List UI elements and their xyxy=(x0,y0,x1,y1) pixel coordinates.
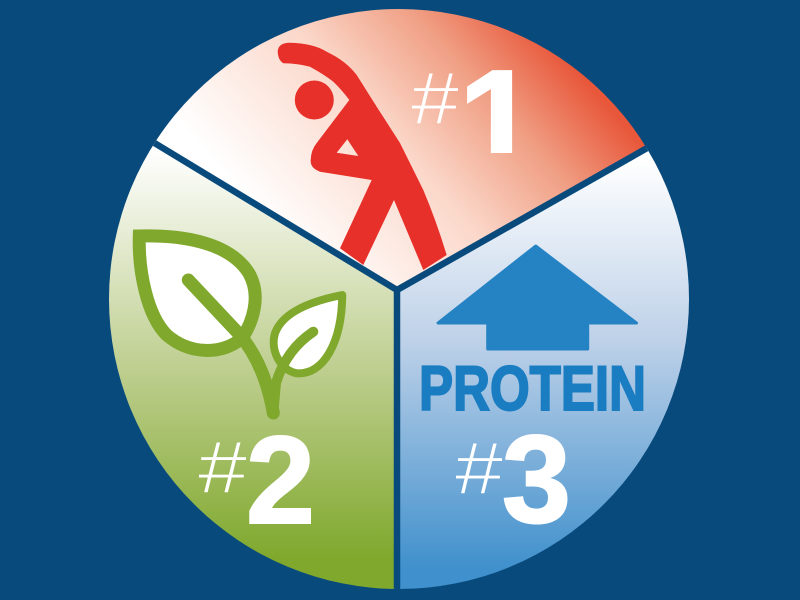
label: #3 xyxy=(455,411,571,549)
label: #2 xyxy=(198,412,315,550)
infographic: three-part circle xyxy=(109,9,689,589)
dividers xyxy=(153,140,648,589)
segment: green xyxy=(109,142,396,589)
label: #1 xyxy=(412,70,512,153)
label: PROTEIN: PROTEIN xyxy=(419,354,646,424)
label: #1: # xyxy=(411,57,459,140)
icon: up arrow xyxy=(438,246,636,349)
pie circle xyxy=(109,9,689,589)
segment: red xyxy=(154,9,646,286)
icon: plant with two leaves xyxy=(139,236,342,413)
segment: blue xyxy=(400,147,689,589)
label: #3: 3 xyxy=(502,411,571,549)
label: #2: 2 xyxy=(246,412,315,550)
icon: stretching figure xyxy=(278,43,447,270)
label: #1: 1 xyxy=(458,40,538,201)
label: #2: # xyxy=(198,426,247,509)
label: #3: # xyxy=(455,427,503,510)
